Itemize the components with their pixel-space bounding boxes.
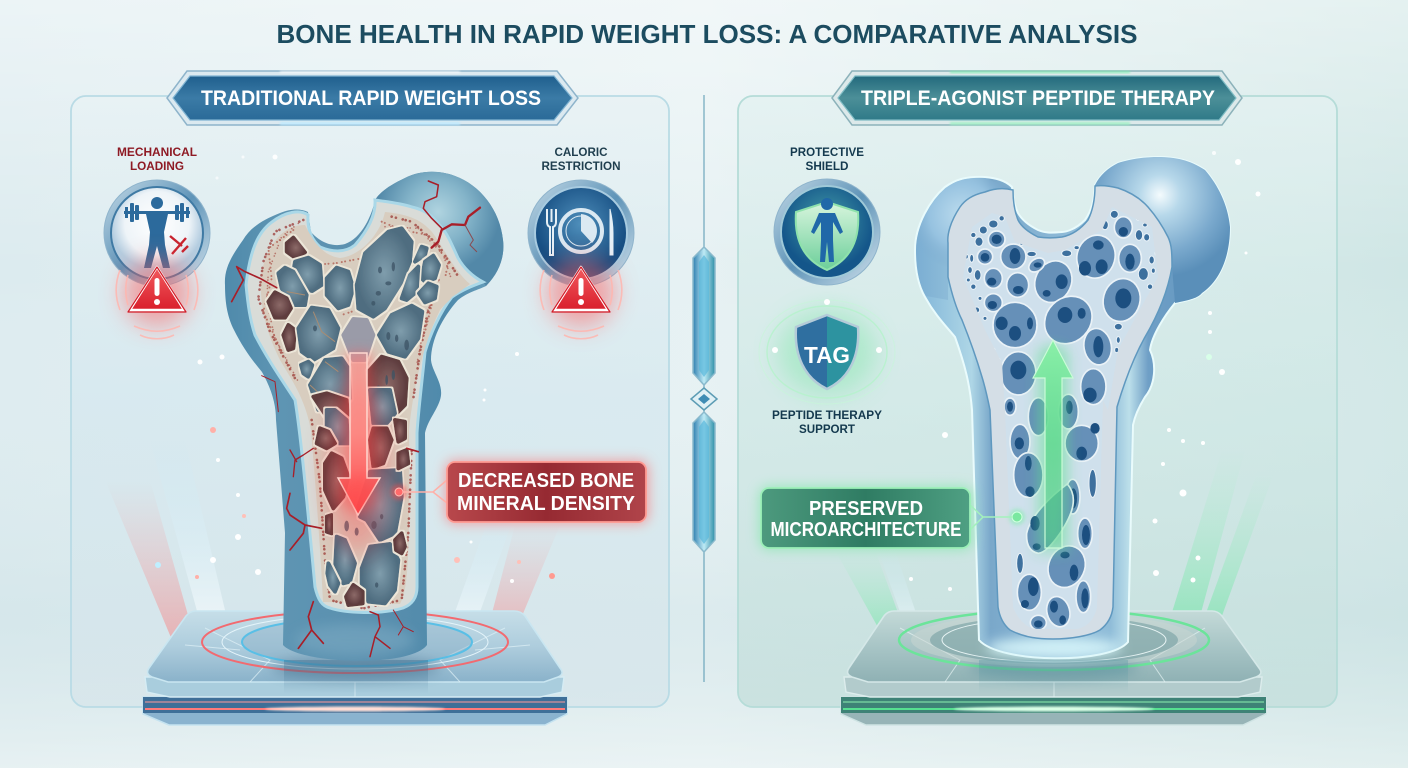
icon group: caloric restriction [528, 145, 634, 339]
icon: TAG shield: TAG [804, 342, 850, 368]
cracks left [232, 181, 480, 657]
label: caloric restriction: RESTRICTION [542, 159, 620, 173]
callout: decreased bone mineral density [391, 460, 649, 524]
panel: triple-agonist peptide therapy [738, 71, 1337, 725]
icon: warning triangle [116, 259, 198, 339]
center divider [691, 95, 717, 682]
label: mechanical loading: LOADING [130, 159, 184, 173]
label: caloric restriction: CALORIC [554, 145, 608, 159]
light beams right [835, 450, 1275, 640]
header: traditional rapid weight loss [167, 71, 578, 125]
light beams left [105, 440, 560, 640]
femur right [915, 157, 1230, 680]
title: BONE HEALTH IN RAPID WEIGHT LOSS: A COMPARATIVE ANALYSIS [276, 19, 1138, 49]
header: triple-agonist peptide therapy: TRIPLE-AGONIST PEPTIDE THERAPY [861, 87, 1215, 110]
panel frame right [738, 96, 1337, 707]
icon group: protective shield [759, 145, 895, 436]
callout: preserved microarchitecture [759, 486, 1025, 550]
icon: warning triangle [540, 259, 622, 339]
green preservation arrow [1033, 340, 1073, 548]
particles right [909, 151, 1260, 591]
callout: decreased bone mineral density: DECREASED BONE [458, 470, 634, 492]
bone cross-section right [948, 186, 1172, 640]
label: protective shield: SHIELD [806, 159, 849, 173]
platform right [841, 610, 1266, 725]
panel: traditional rapid weight loss [71, 71, 669, 725]
particles left [155, 154, 555, 583]
header: triple-agonist peptide therapy [832, 71, 1242, 125]
icon: weightlifter [104, 180, 210, 286]
panel frame left [71, 96, 669, 707]
platform left [143, 611, 567, 725]
label: peptide therapy support: PEPTIDE THERAPY [772, 408, 882, 422]
callout: preserved microarchitecture: MICROARCHITECTURE [770, 519, 962, 541]
label: protective shield: PROTECTIVE [790, 145, 864, 159]
header: traditional rapid weight loss: TRADITIONAL RAPID WEIGHT LOSS [201, 87, 541, 110]
callout: preserved microarchitecture: PRESERVED [809, 498, 923, 520]
icon: plate and cutlery [528, 180, 634, 286]
label: peptide therapy support: SUPPORT [799, 422, 856, 436]
icon: TAG shield [759, 299, 895, 404]
icon: shield with person [774, 179, 880, 285]
bone cross-section left [246, 200, 483, 613]
red density arrow [338, 352, 380, 515]
label: mechanical loading: MECHANICAL [117, 145, 197, 159]
callout: decreased bone mineral density: MINERAL DENSITY [457, 493, 636, 515]
icon group: mechanical loading [104, 145, 210, 339]
femur left [225, 172, 503, 680]
